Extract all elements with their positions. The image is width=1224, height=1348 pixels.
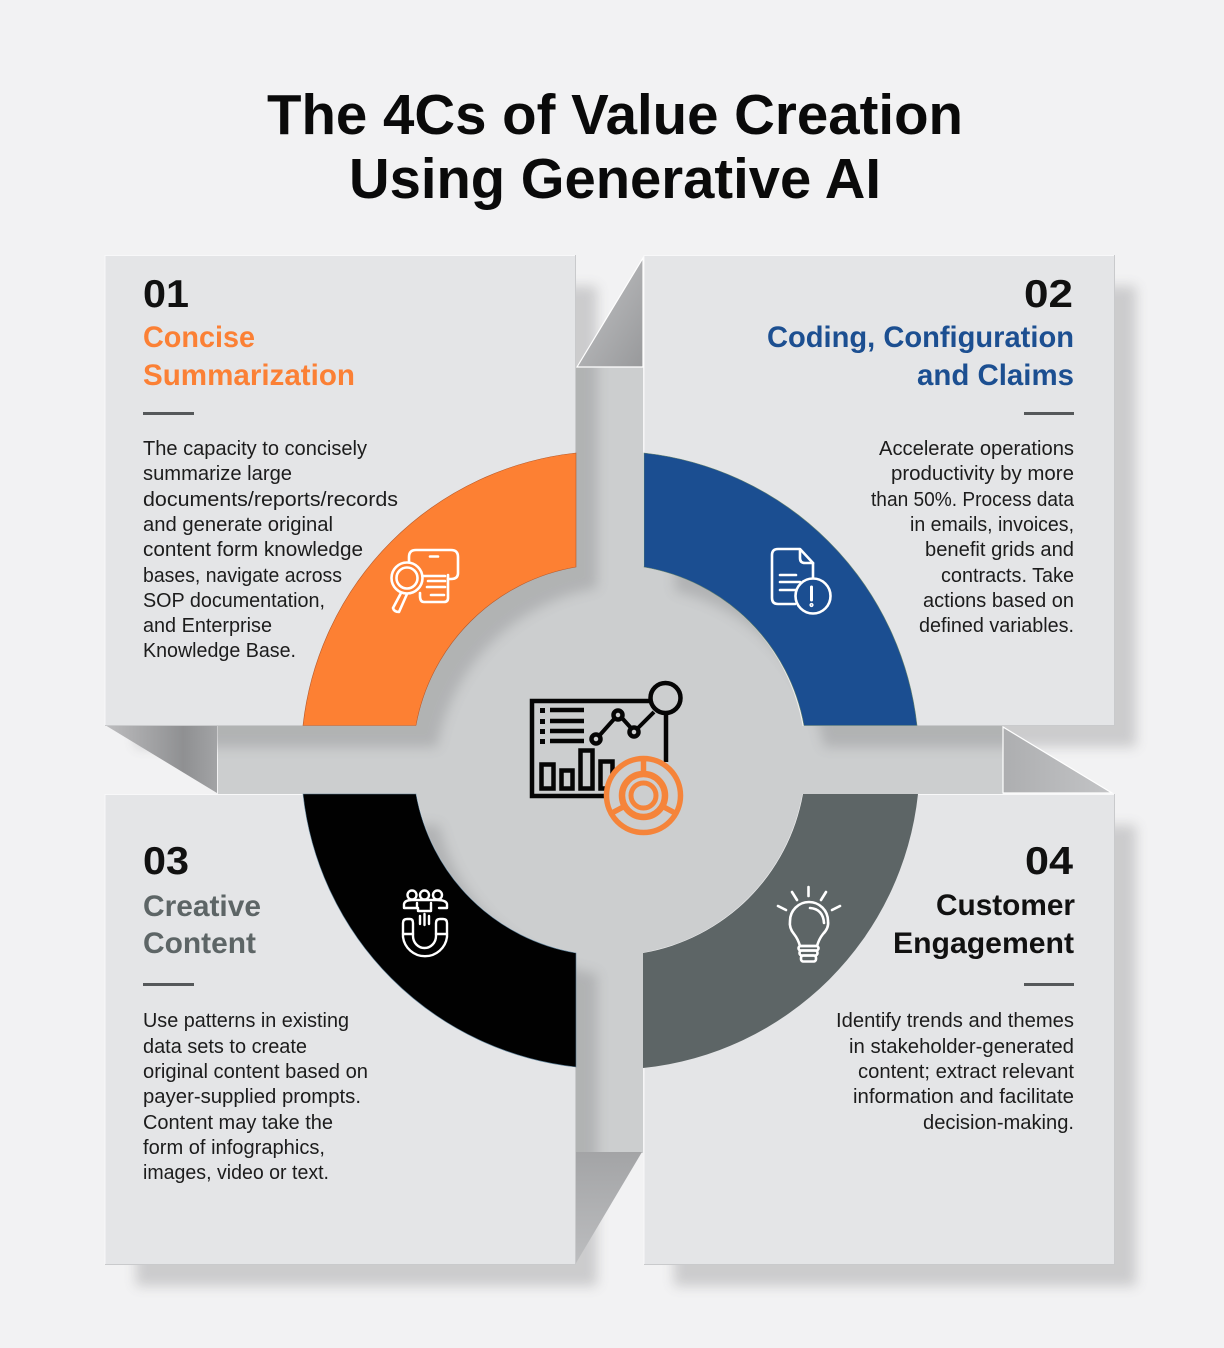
body text 4: [836, 1010, 1074, 1134]
number 04: 04: [1025, 840, 1073, 883]
body text 2: defined variables.: [919, 615, 1074, 637]
body text 4: Identify trends and themes: [836, 1010, 1074, 1032]
body text 1: The capacity to concisely: [143, 438, 367, 460]
orange target: [606, 758, 680, 832]
body text 3: images, video or text.: [143, 1162, 329, 1184]
number 01: 01: [143, 273, 189, 316]
ring segment: grey: [643, 794, 918, 1068]
body text 4: decision-making.: [923, 1112, 1074, 1134]
number 03: 03: [143, 840, 189, 883]
heading: Customer Engagement: Engagement: [893, 927, 1074, 960]
body text 2: contracts. Take: [941, 565, 1074, 587]
body text 2: actions based on: [923, 590, 1074, 612]
ring segment: black: [303, 794, 576, 1067]
body text 1: SOP documentation,: [143, 590, 325, 612]
body text 2: in emails, invoices,: [910, 514, 1074, 536]
body text 4: information and facilitate: [853, 1086, 1074, 1108]
body text 1: documents/reports/records: [143, 489, 398, 511]
fold triangle left: [105, 725, 217, 793]
heading: Concise Summarization: Summarization: [143, 359, 355, 392]
body text 1: [143, 438, 398, 662]
heading: Creative Content: Content: [143, 927, 256, 960]
body text 3: Use patterns in existing: [143, 1010, 349, 1032]
body text 4: content; extract relevant: [858, 1061, 1074, 1083]
icon: light bulb: [778, 887, 840, 962]
icon: magnifier and documents: [392, 550, 458, 612]
body text 1: bases, navigate across: [143, 565, 342, 587]
heading: Coding, Configuration and Claims: Coding, Configuration: [767, 321, 1074, 354]
body text 3: Content may take the: [143, 1112, 333, 1134]
ring segment: blue: [644, 453, 917, 726]
heading: Creative Content: [143, 890, 261, 960]
ring segment: orange: [303, 453, 576, 726]
title: [267, 83, 963, 211]
icon: document with alert: [772, 549, 830, 614]
panel: card 4: [644, 794, 1114, 1264]
body text 2: benefit grids and: [925, 539, 1074, 561]
heading: Customer Engagement: Customer: [936, 889, 1075, 922]
heading: Coding, Configuration and Claims: [767, 321, 1074, 392]
heading: Customer Engagement: [893, 889, 1075, 960]
card shadows: [136, 286, 1136, 1286]
fold triangle right: [1003, 727, 1112, 793]
number 02: 02: [1024, 273, 1073, 316]
body text 2: Accelerate operations: [879, 438, 1074, 460]
body text 2: productivity by more: [891, 463, 1074, 485]
body text 3: [143, 1010, 368, 1184]
panel: card 1: [105, 255, 576, 726]
heading: Concise Summarization: Concise: [143, 321, 255, 354]
heading: Concise Summarization: [143, 321, 355, 392]
heading: Creative Content: Creative: [143, 890, 261, 923]
body text 3: payer-supplied prompts.: [143, 1086, 361, 1108]
body text 3: data sets to create: [143, 1036, 307, 1058]
body text 1: and Enterprise: [143, 615, 272, 637]
title: The 4Cs of Value Creation: [267, 83, 963, 147]
heading: Coding, Configuration and Claims: and Claims: [917, 359, 1074, 392]
title: Using Generative AI: [349, 147, 881, 211]
body text 1: and generate original: [143, 514, 333, 536]
body text 4: in stakeholder-generated: [849, 1036, 1074, 1058]
icon: magnet attracting people: [403, 890, 447, 956]
panel: card 2: [644, 255, 1114, 726]
body text 2: [871, 438, 1075, 637]
body text 3: form of infographics,: [143, 1137, 325, 1159]
fold triangle top: [577, 258, 643, 367]
fold triangle bottom: [576, 1152, 642, 1263]
body text 2: than 50%. Process data: [871, 489, 1075, 511]
icon: analytics dashboard: [532, 683, 680, 832]
body text 1: content form knowledge: [143, 539, 363, 561]
cross bars and center disc: [218, 367, 1003, 1153]
panel: card 3: [105, 794, 576, 1264]
body text 1: Knowledge Base.: [143, 640, 296, 662]
body text 3: original content based on: [143, 1061, 368, 1083]
body text 1: summarize large: [143, 463, 292, 485]
